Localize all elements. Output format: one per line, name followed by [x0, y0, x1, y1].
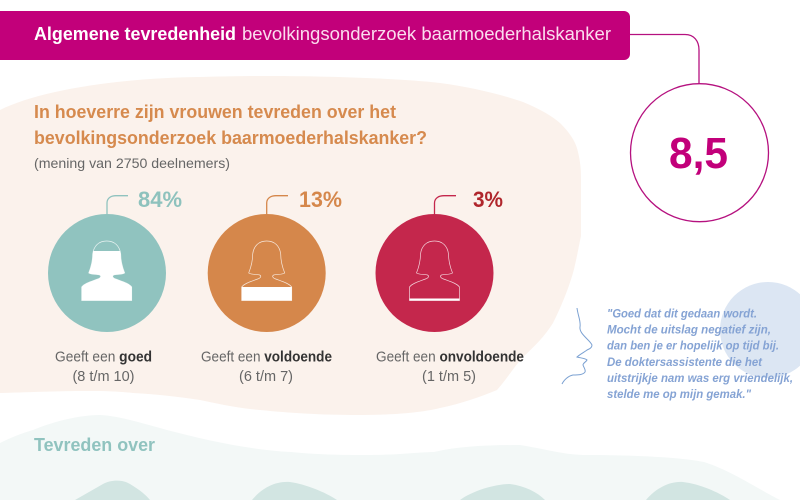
quote [607, 306, 793, 401]
range: (6 t/m 7) [239, 369, 293, 385]
percentage: 84% [138, 187, 182, 212]
title bar [0, 11, 630, 60]
connector [434, 196, 456, 214]
background blob: peach [0, 76, 581, 415]
group: onvoldoende 3% [376, 187, 524, 385]
heading: In hoeverre zijn vrouwen tevreden over het [34, 101, 396, 122]
circle [48, 214, 166, 332]
score: 8,5 [669, 129, 728, 178]
section heading: Tevreden over [34, 435, 155, 455]
circle [376, 214, 494, 332]
group: goed 84% [48, 187, 182, 385]
heading [34, 101, 427, 148]
title light: bevolkingsonderzoek baarmoederhalskanker [242, 24, 611, 44]
icon: face profile line [562, 308, 592, 384]
title bold: Algemene tevredenheid [34, 24, 236, 44]
quote: De doktersassistente die het [607, 355, 763, 369]
label: Geeft een onvoldoende [376, 350, 524, 366]
heading: bevolkingsonderzoek baarmoederhalskanker? [34, 127, 427, 148]
circle [208, 214, 326, 332]
percentage: 3% [473, 187, 503, 212]
background blob: pale teal [0, 415, 780, 500]
connector to score [630, 34, 699, 84]
teal mounds [75, 481, 730, 500]
quote: "Goed dat dit gedaan wordt. [607, 306, 757, 320]
blue quote circle [720, 282, 800, 378]
label: Geeft een goed [55, 350, 152, 366]
quote: dan ben je er hopelijk op tijd bij. [607, 338, 779, 352]
quote: stelde me op mijn gemak." [607, 387, 751, 401]
connector [107, 196, 128, 214]
range: (1 t/m 5) [422, 369, 476, 385]
quote: uitstrijkje nam was erg vriendelijk, [607, 371, 793, 385]
group: voldoende 13% [201, 187, 342, 385]
quote: Mocht de uitslag negatief zijn, [607, 322, 771, 336]
icon: woman 84% filled [82, 241, 132, 300]
icon: woman 13% filled [242, 241, 292, 300]
icon: woman 3% filled [410, 241, 460, 300]
subheading: (mening van 2750 deelnemers) [34, 155, 230, 171]
percentage: 13% [299, 187, 342, 212]
score circle [630, 84, 768, 222]
range: (8 t/m 10) [72, 369, 135, 385]
connector [267, 196, 288, 214]
label: Geeft een voldoende [201, 350, 332, 366]
